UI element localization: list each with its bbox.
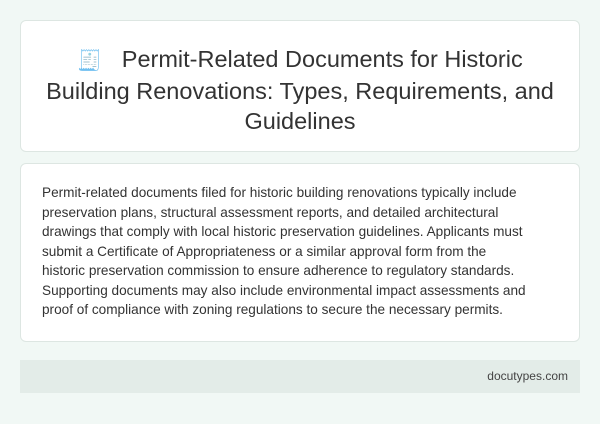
title card	[20, 20, 580, 152]
description card	[20, 163, 580, 342]
description text: preservation plans, structural assessment reports, and detailed architectural	[42, 204, 498, 220]
description text: drawings that comply with local historic preservation guidelines. Applicants must	[42, 224, 523, 239]
title	[46, 46, 554, 134]
footer	[20, 360, 580, 393]
description text: Permit-related documents filed for historic building renovations typically include	[42, 185, 517, 200]
footer: docutypes.com	[487, 369, 568, 383]
title: Guidelines	[244, 108, 356, 134]
title: 🧾 Permit-Related Documents for Historic	[77, 46, 523, 72]
title: Building Renovations: Types, Requirements, and	[46, 78, 554, 104]
description text: proof of compliance with zoning regulations to secure the necessary permits.	[42, 302, 503, 317]
description text	[42, 185, 526, 317]
description text: Supporting documents may also include environmental impact assessments and	[42, 282, 526, 298]
description text: submit a Certificate of Appropriateness or a similar approval form from the	[42, 244, 486, 258]
description text: historic preservation commission to ensure adherence to regulatory standards.	[42, 263, 514, 278]
